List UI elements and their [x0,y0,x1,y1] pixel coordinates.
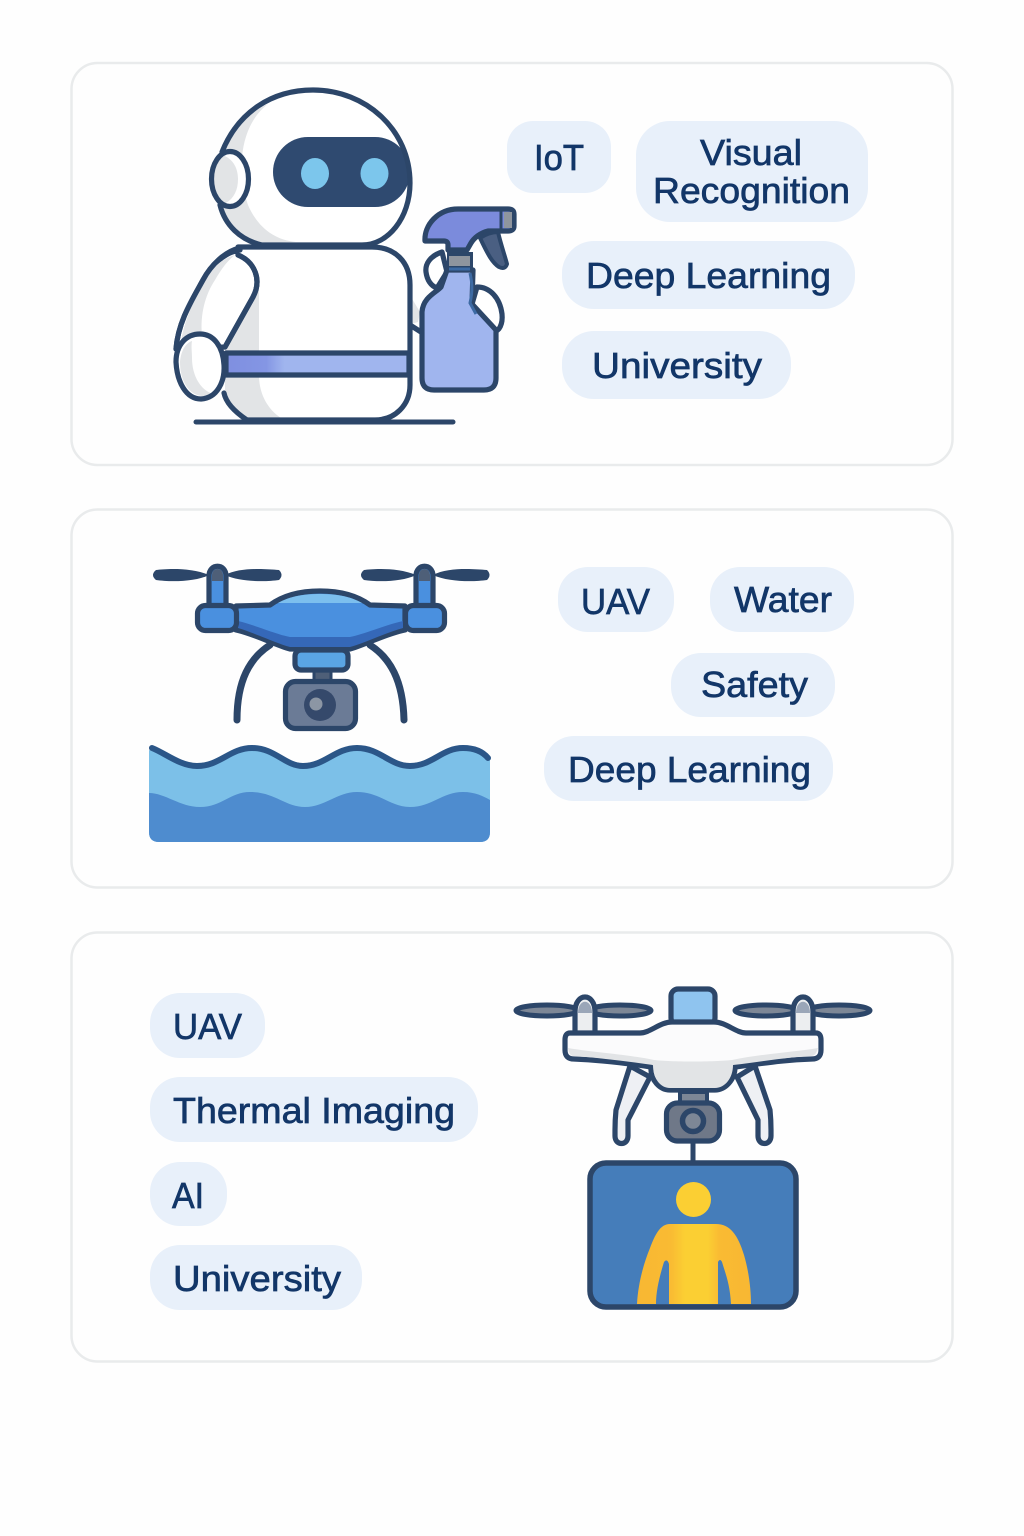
water [149,748,490,842]
panel: thermal drone card [72,932,952,1362]
eyes [301,158,388,189]
sensor box [671,989,715,1025]
keyword pill: Water: Water [734,579,832,620]
keyword pill: AI [150,1162,227,1226]
belt [226,353,409,375]
bottle body [422,270,496,390]
keyword pill: Deep Learning [544,736,833,801]
keyword pill: University [150,1245,362,1310]
keyword pill: Visual Recognition: Visual [700,132,802,173]
robot ear [212,152,248,206]
camera [666,1092,720,1141]
keyword pill: UAV [150,993,265,1058]
keyword pill: IoT: IoT [534,137,584,178]
keyword pill: Safety: Safety [701,664,808,705]
left finger loop [426,252,447,288]
robot body [176,245,410,420]
robot side shade and bottle-hand link [410,297,421,332]
keyword pill: University [562,331,791,399]
keyword pill: UAV: UAV [173,1006,242,1047]
icon: robot with spray bottle [176,90,514,422]
icon: white drone with thermal screen [516,989,870,1307]
gimbal mount [295,650,348,684]
thermal screen [590,1163,796,1307]
keyword pill: Thermal Imaging [150,1077,478,1142]
keyword pill: Deep Learning: Deep Learning [586,255,831,296]
landing legs [615,1066,771,1144]
keyword pill: University: University [592,345,762,386]
keyword pill: University: University [173,1258,341,1299]
motors [209,566,433,606]
sprayer head [425,209,514,250]
ground line [196,420,453,424]
panel: robot card [72,63,952,465]
robot hand [176,334,224,399]
trigger [480,232,507,268]
keyword pill: Water [710,567,854,632]
keyword pill: IoT [507,121,611,193]
keyword pill: Safety [671,653,835,717]
keyword pill: Thermal Imaging: Thermal Imaging [173,1090,455,1131]
keyword pill: AI: AI [172,1175,204,1216]
keyword pill: UAV [558,567,674,632]
person body [637,1224,751,1304]
right finger loop [472,287,502,331]
propellers [516,1005,870,1016]
panel: water drone card [72,510,952,888]
camera [286,682,356,728]
keyword pill: Visual Recognition: Recognition [653,170,850,211]
keyword pill: Deep Learning: Deep Learning [568,749,811,790]
keyword pill: Visual Recognition [636,121,868,222]
collar [447,252,473,272]
nozzle [504,212,512,228]
robot head [220,90,410,245]
icon: blue drone over water [149,566,490,842]
robot arm [176,248,257,349]
spray bottle [422,209,514,390]
person head [676,1182,711,1217]
landing legs [237,645,404,720]
drone body [565,1022,821,1090]
visor [273,137,410,207]
connector line [690,1141,696,1163]
propellers [153,569,490,581]
motors [575,997,813,1034]
drone body [198,591,444,649]
bottle inner edge [470,273,476,314]
keyword pill: Deep Learning [562,241,855,309]
keyword pill: UAV: UAV [581,581,650,622]
